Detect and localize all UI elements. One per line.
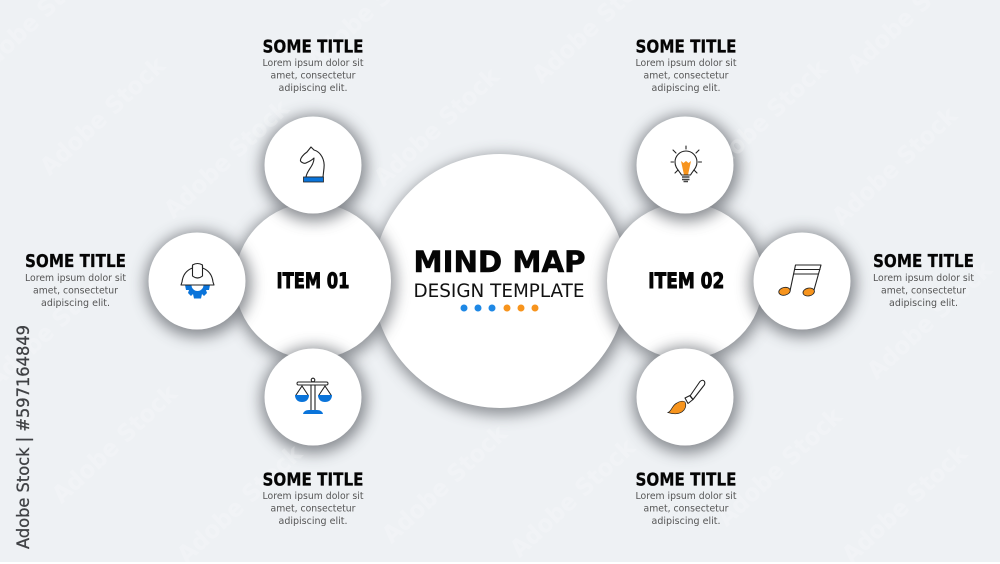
text block: bottom left: SOME TITLE xyxy=(262,470,364,490)
text block: left: adipiscing elit. xyxy=(41,298,110,309)
text block: top left xyxy=(262,38,364,94)
text block: right: adipiscing elit. xyxy=(889,298,958,309)
text block: bottom right: adipiscing elit. xyxy=(652,516,720,527)
text block: right: Lorem ipsum dolor sit xyxy=(873,273,974,284)
text block: top right: adipiscing elit. xyxy=(652,83,720,94)
text block: top left: amet, consectetur xyxy=(270,70,356,82)
central subtitle: DESIGN TEMPLATE xyxy=(414,281,584,302)
text block: left: SOME TITLE xyxy=(25,252,126,272)
text block: bottom left: adipiscing elit. xyxy=(278,516,348,527)
icon: chess knight xyxy=(300,147,324,182)
item 01 circle xyxy=(232,202,396,366)
text block: left: Lorem ipsum dolor sit xyxy=(25,273,126,284)
icon: balance scale xyxy=(295,378,332,414)
text block: top left: SOME TITLE xyxy=(262,38,364,58)
text block: right xyxy=(873,252,974,309)
pagination dots xyxy=(460,304,538,312)
node: justice xyxy=(261,347,367,453)
item 02 label: ITEM 02 xyxy=(648,269,724,293)
text block: right: amet, consectetur xyxy=(881,286,966,296)
icon: musical notes xyxy=(778,265,821,297)
item 02 circle xyxy=(604,202,768,366)
node: music xyxy=(750,231,856,337)
text: Adobe Stock xyxy=(711,402,848,532)
text block: left xyxy=(25,252,126,309)
central circle xyxy=(372,154,632,415)
text: Adobe Stock xyxy=(34,51,171,181)
node: strategy xyxy=(261,115,367,221)
text block: top right: amet, consectetur xyxy=(644,70,729,82)
central title: MIND MAP xyxy=(414,245,586,279)
text block: right: SOME TITLE xyxy=(873,252,974,272)
icon: light bulb xyxy=(671,146,702,182)
text block: top left: adipiscing elit. xyxy=(278,83,348,94)
node: safety xyxy=(145,231,251,337)
text block: bottom left xyxy=(262,470,364,527)
icon: helmet and gear xyxy=(181,264,214,298)
text block: bottom right: SOME TITLE xyxy=(636,470,736,490)
text: Adobe Stock xyxy=(826,101,963,231)
node: idea xyxy=(633,115,739,221)
text block: top right xyxy=(636,38,737,94)
text: Adobe Stock xyxy=(376,419,513,549)
text block: left: amet, consectetur xyxy=(33,286,118,296)
text: Adobe Stock xyxy=(158,94,295,224)
text: Adobe Stock xyxy=(46,379,183,509)
text block: top right: SOME TITLE xyxy=(636,38,736,58)
node: art xyxy=(633,347,739,453)
text block: bottom left: amet, consectetur xyxy=(270,504,356,514)
text block: bottom right: Lorem ipsum dolor sit xyxy=(636,491,737,502)
text block: top left: Lorem ipsum dolor sit xyxy=(262,58,364,69)
stock id label: Adobe Stock | #597164849 xyxy=(14,325,34,549)
text: Adobe Stock xyxy=(368,62,505,192)
item 01 label: ITEM 01 xyxy=(276,269,350,293)
icon: paint brush xyxy=(668,380,705,414)
text: Adobe Stock xyxy=(696,54,833,184)
text: Adobe Stock xyxy=(504,433,641,563)
text block: bottom right xyxy=(636,470,737,527)
text block: bottom left: Lorem ipsum dolor sit xyxy=(262,491,364,502)
text block: top right: Lorem ipsum dolor sit xyxy=(636,58,737,69)
text block: bottom right: amet, consectetur xyxy=(644,504,729,514)
